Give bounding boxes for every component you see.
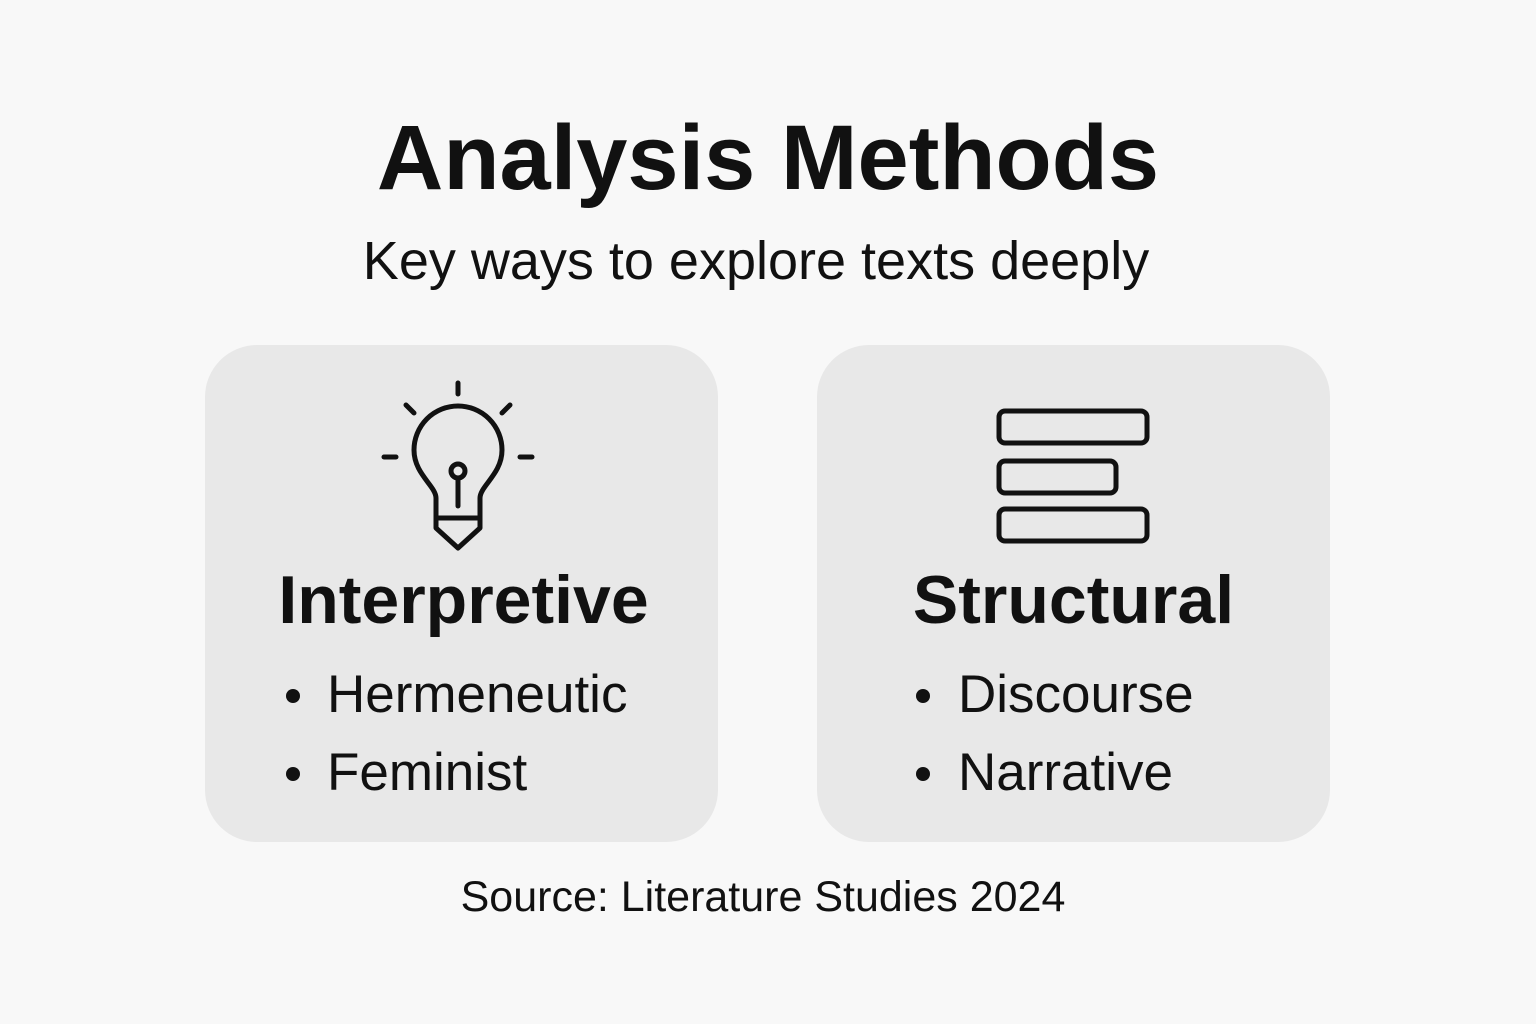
icon: lightbulb bbox=[382, 380, 534, 551]
heading: Structural: Structural bbox=[913, 562, 1234, 638]
panel: structural bbox=[817, 345, 1330, 842]
bullet list: Narrative bbox=[958, 743, 1173, 802]
title: Analysis Methods bbox=[377, 107, 1159, 209]
bullet list bbox=[286, 665, 627, 802]
bullet list: Discourse bbox=[958, 665, 1194, 724]
source footnote: Source: Literature Studies 2024 bbox=[461, 873, 1065, 921]
panel: interpretive bbox=[205, 345, 718, 842]
icon: stacked bars bbox=[996, 408, 1150, 544]
bullet list: Hermeneutic bbox=[327, 665, 627, 724]
heading: Interpretive: Interpretive bbox=[278, 562, 649, 638]
bullet list bbox=[916, 665, 1194, 802]
subtitle: Key ways to explore texts deeply bbox=[363, 231, 1149, 291]
bullet list: Feminist bbox=[327, 743, 527, 802]
